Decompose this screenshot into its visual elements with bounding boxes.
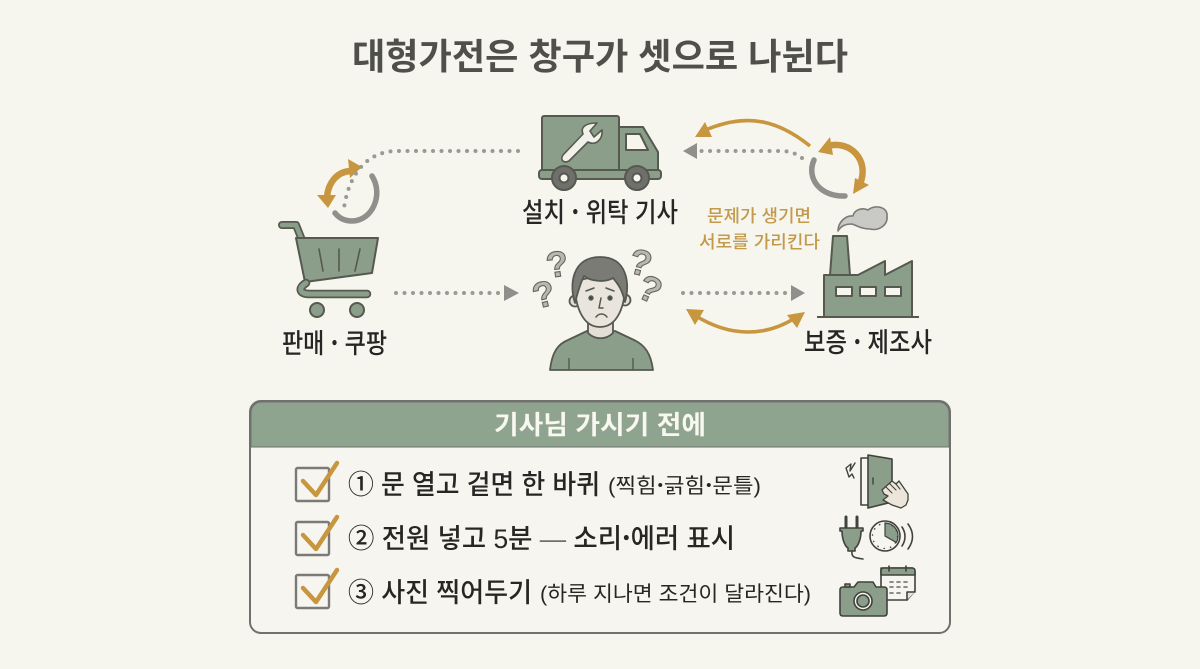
panel: checklist <box>250 401 950 633</box>
icon: shopping cart <box>282 225 378 317</box>
icon: door and hand <box>846 455 908 508</box>
icon: confused person <box>550 257 653 370</box>
dotted arrow: truck to cart <box>344 151 518 208</box>
icons: question marks: ? <box>625 240 656 285</box>
item 1 text: (찍힘·긁힘·문틀) <box>608 470 761 500</box>
dotted arrow: person to factory <box>683 285 805 301</box>
dotted arrow: cart to person <box>396 285 519 301</box>
checkbox 1 <box>296 463 337 501</box>
orange double arrow: person and factory <box>686 309 805 332</box>
right cycle arrows <box>812 137 869 196</box>
label: manufacturer: 보증 · 제조사 <box>804 321 932 360</box>
item 1 text <box>348 470 761 500</box>
icons: question marks <box>528 240 669 317</box>
icons: question marks: ? <box>632 266 669 312</box>
icon: camera <box>840 582 887 616</box>
dotted arrow: factory to truck <box>683 143 802 159</box>
callout: blame text: 서로를 가리킨다 <box>699 232 820 252</box>
icon: calendar <box>881 566 915 600</box>
panel frame <box>250 401 950 633</box>
icon: truck <box>539 116 661 190</box>
icon: factory <box>817 207 919 317</box>
title: 대형가전은 창구가 셋으로 나뉜다 <box>352 36 848 77</box>
panel header <box>251 402 949 447</box>
orange arrow: factory to truck <box>695 121 810 146</box>
callout: blame text <box>699 206 820 252</box>
item 3 text: (하루 지나면 조건이 달라진다) <box>540 583 811 606</box>
icons: question marks: ? <box>528 272 559 317</box>
icon: plug <box>840 517 863 559</box>
item 1 text: ① 문 열고 겉면 한 바퀴 <box>348 470 600 500</box>
left cycle arrows <box>317 159 377 221</box>
checkbox 2 <box>296 517 337 555</box>
item 2 text: ② 전원 넣고 5분 — 소리·에러 표시 <box>348 517 735 556</box>
item 3 text <box>348 578 811 608</box>
item 3 text: ③ 사진 찍어두기 <box>348 578 532 608</box>
panel heading: 기사님 가시기 전에 <box>494 410 706 440</box>
icons: question marks: ? <box>543 242 571 286</box>
icon: clock with sound waves <box>870 521 912 551</box>
label: retailer: 판매 · 쿠팡 <box>282 322 387 361</box>
label: installer: 설치 · 위탁 기사 <box>522 191 678 230</box>
checkbox 3 <box>296 570 337 608</box>
callout: blame text: 문제가 생기면 <box>707 206 811 226</box>
